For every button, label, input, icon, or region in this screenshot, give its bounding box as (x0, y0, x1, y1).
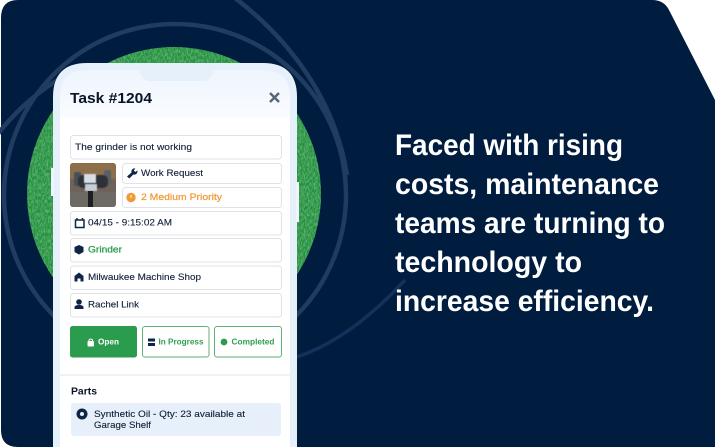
headline: costs, maintenance (395, 168, 659, 201)
headline: teams are turning to (395, 207, 665, 240)
parts heading: Parts (71, 386, 97, 398)
field: asset (70, 238, 282, 262)
parts row: Synthetic Oil - Qty: 23 available at (94, 409, 245, 420)
parts row: Garage Shelf (94, 420, 151, 431)
phone header (60, 70, 290, 118)
field: priority (122, 188, 282, 208)
side buttons (51, 168, 299, 222)
button: completed (214, 326, 282, 357)
grinder photo (70, 163, 116, 207)
parts row (71, 403, 281, 436)
field: asset: Grinder (88, 244, 123, 256)
task title: Task #1204 (70, 90, 153, 107)
button: in progress: In Progress (158, 338, 204, 346)
decorative rings (0, 0, 405, 366)
button: open: Open (98, 338, 119, 346)
headline: Faced with rising (395, 129, 623, 162)
phone (51, 63, 299, 447)
field: date: 04/15 - 9:15:02 AM (88, 218, 172, 228)
close icon (270, 93, 279, 102)
button: open (70, 326, 137, 358)
button: completed: Completed (232, 338, 275, 346)
field: work request (122, 164, 282, 184)
notch (133, 63, 220, 81)
field: assignee (70, 294, 282, 317)
field: description (70, 136, 282, 159)
divider (60, 374, 290, 376)
field: location (70, 266, 282, 290)
headline (395, 129, 665, 318)
screen (60, 112, 290, 447)
button: in progress (142, 326, 209, 357)
headline: technology to (395, 246, 582, 279)
field: description: The grinder is not working (75, 142, 192, 153)
field: assignee: Rachel Link (88, 300, 139, 310)
headline: increase efficiency. (395, 285, 654, 318)
field: priority: 2 Medium Priority (141, 192, 222, 203)
field: date (70, 212, 282, 235)
field: location: Milwaukee Machine Shop (88, 272, 201, 283)
field: work request: Work Request (141, 168, 203, 179)
phone body (53, 63, 297, 447)
green circle (27, 47, 321, 341)
